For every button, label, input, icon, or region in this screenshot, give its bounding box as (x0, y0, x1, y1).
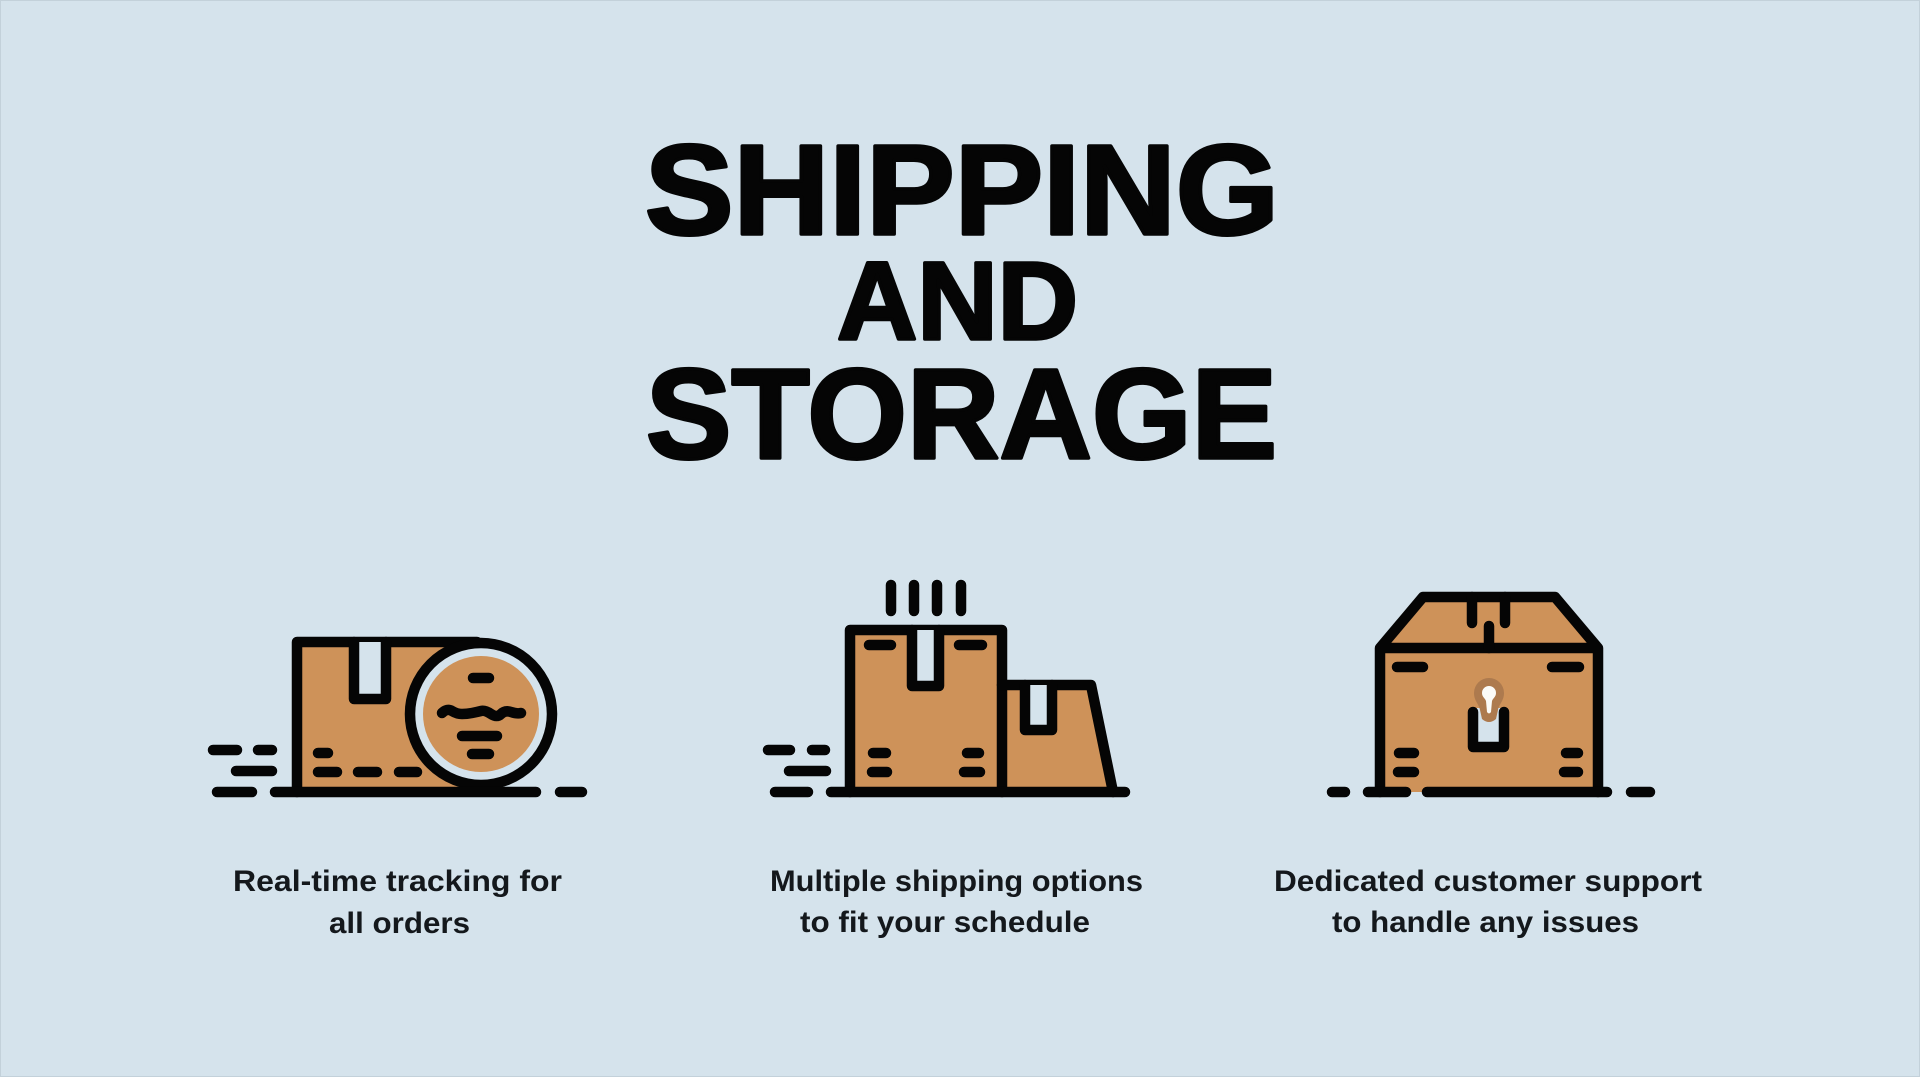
small box (1002, 685, 1113, 792)
caption: real-time tracking: Real-time tracking for (233, 865, 562, 898)
icon: stacked shipping boxes (768, 585, 1125, 792)
upward lines (891, 585, 961, 611)
caption: multiple shipping options: to fit your schedule (800, 906, 1090, 939)
caption: multiple shipping options: Multiple shipping options (770, 865, 1143, 898)
motion lines and ground (768, 750, 1125, 792)
icon: locked storage box (1332, 597, 1650, 792)
caption: real-time tracking: all orders (329, 907, 470, 940)
motion lines (213, 750, 582, 792)
icon: package with magnifying tracking lens (213, 642, 582, 792)
ground line (1332, 787, 1650, 797)
title: AND (837, 240, 1078, 363)
title: SHIPPING (645, 119, 1279, 262)
storage box dashes (1397, 667, 1579, 772)
magnifier lens (410, 643, 552, 785)
lid notches (1472, 597, 1505, 648)
package label dashes (318, 753, 417, 772)
caption: dedicated customer support: Dedicated customer support (1274, 865, 1702, 898)
title: STORAGE (646, 343, 1277, 486)
package tape label (354, 642, 386, 699)
large box (850, 630, 1002, 792)
lock (1473, 678, 1504, 747)
caption: dedicated customer support: to handle any issues (1332, 906, 1639, 939)
title (645, 119, 1279, 486)
